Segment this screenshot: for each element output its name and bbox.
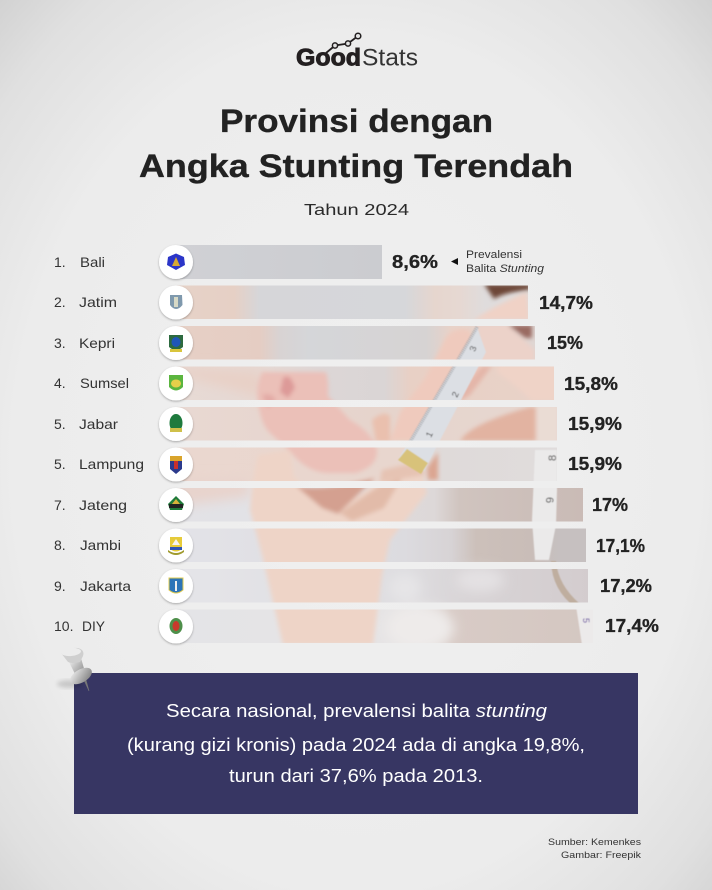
photo bars: baby foot being measured: 3 [467, 345, 479, 353]
row 9: Jakarta: 17,2% [600, 576, 652, 596]
photo bars: baby foot being measured: 5 [581, 618, 591, 623]
row 5: Jabar: Jabar [79, 416, 118, 432]
icon: push pin [57, 647, 95, 691]
callout text: Secara nasional, prevalensi balita stunting [166, 701, 547, 721]
row 7: Jateng: Jateng [79, 497, 127, 513]
photo bars: baby foot being measured: 2 [450, 390, 461, 399]
row 3: Kepri: 3. [54, 335, 66, 351]
photo bars: baby foot being measured: 6 [543, 497, 555, 503]
annotation: Prevalensi Balita Stunting [451, 249, 545, 275]
row 4: Sumsel: Sumsel [80, 375, 129, 391]
row 3: Kepri: 15% [547, 333, 583, 353]
title [139, 103, 573, 184]
callout panel [74, 673, 638, 814]
row 3: Kepri [54, 326, 583, 360]
row 5: Jabar: 5. [54, 416, 66, 432]
logo: GoodStats: Good [296, 44, 361, 72]
row 1: Bali: Bali [80, 254, 105, 270]
row 10: DIY [54, 610, 659, 644]
source credits: Sumber: Kemenkes [548, 837, 641, 848]
row 6: Lampung: Lampung [79, 456, 144, 472]
logo: GoodStats: Stats [362, 44, 418, 72]
row 4: Sumsel: 4. [54, 375, 66, 391]
row 10: DIY: 17,4% [605, 616, 659, 636]
tape measure vertical [532, 450, 557, 560]
photo bars: baby foot being measured [176, 284, 596, 650]
bar 1: plain grey bar [176, 245, 382, 279]
annotation: Prevalensi Balita Stunting: Balita Stunting [466, 263, 545, 275]
row 6: Lampung [54, 448, 622, 482]
source credits [548, 837, 641, 861]
row 7: Jateng [54, 488, 628, 522]
row 1: Bali [54, 245, 438, 279]
subtitle: year: Tahun 2024 [304, 202, 409, 219]
row 8: Jambi [54, 528, 645, 562]
row 9: Jakarta [54, 569, 652, 603]
row 7: Jateng: 17% [592, 495, 628, 515]
tape measure diagonal [399, 327, 486, 471]
row 5: Jabar: 15,9% [568, 414, 622, 434]
callout text: (kurang gizi kronis) pada 2024 ada di angka 19,8%, [127, 735, 585, 755]
row 9: Jakarta: Jakarta [80, 578, 131, 594]
row 6: Lampung: 5. [54, 456, 66, 472]
row 5: Jabar [54, 407, 622, 441]
callout text [127, 701, 585, 786]
annotation: Prevalensi Balita Stunting: Prevalensi [466, 249, 522, 261]
row 10: DIY: DIY [82, 618, 106, 634]
row 2: Jatim: Jatim [79, 294, 117, 310]
row 9: Jakarta: 9. [54, 578, 66, 594]
row 4: Sumsel [54, 366, 618, 400]
title: Angka Stunting Terendah [139, 148, 573, 184]
photo bars: baby foot being measured: 8 [547, 455, 559, 461]
row 10: DIY: 10. [54, 618, 73, 634]
row 4: Sumsel: 15,8% [564, 374, 618, 394]
row 3: Kepri: Kepri [79, 335, 115, 351]
row 8: Jambi: Jambi [80, 537, 121, 553]
row 7: Jateng: 7. [54, 497, 66, 513]
row 8: Jambi: 17,1% [596, 536, 645, 556]
logo: GoodStats [296, 33, 418, 72]
row 2: Jatim: 2. [54, 294, 66, 310]
callout text: turun dari 37,6% pada 2013. [229, 766, 483, 786]
photo bars: baby foot being measured: 1 [424, 430, 435, 439]
row 2: Jatim: 14,7% [539, 293, 593, 313]
row 2: Jatim [54, 286, 593, 320]
row 6: Lampung: 15,9% [568, 454, 622, 474]
row 1: Bali: 1. [54, 254, 66, 270]
source credits: Gambar: Freepik [561, 850, 641, 861]
row 8: Jambi: 8. [54, 537, 66, 553]
title: Provinsi dengan [220, 103, 493, 139]
row 1: Bali: 8,6% [392, 252, 438, 272]
